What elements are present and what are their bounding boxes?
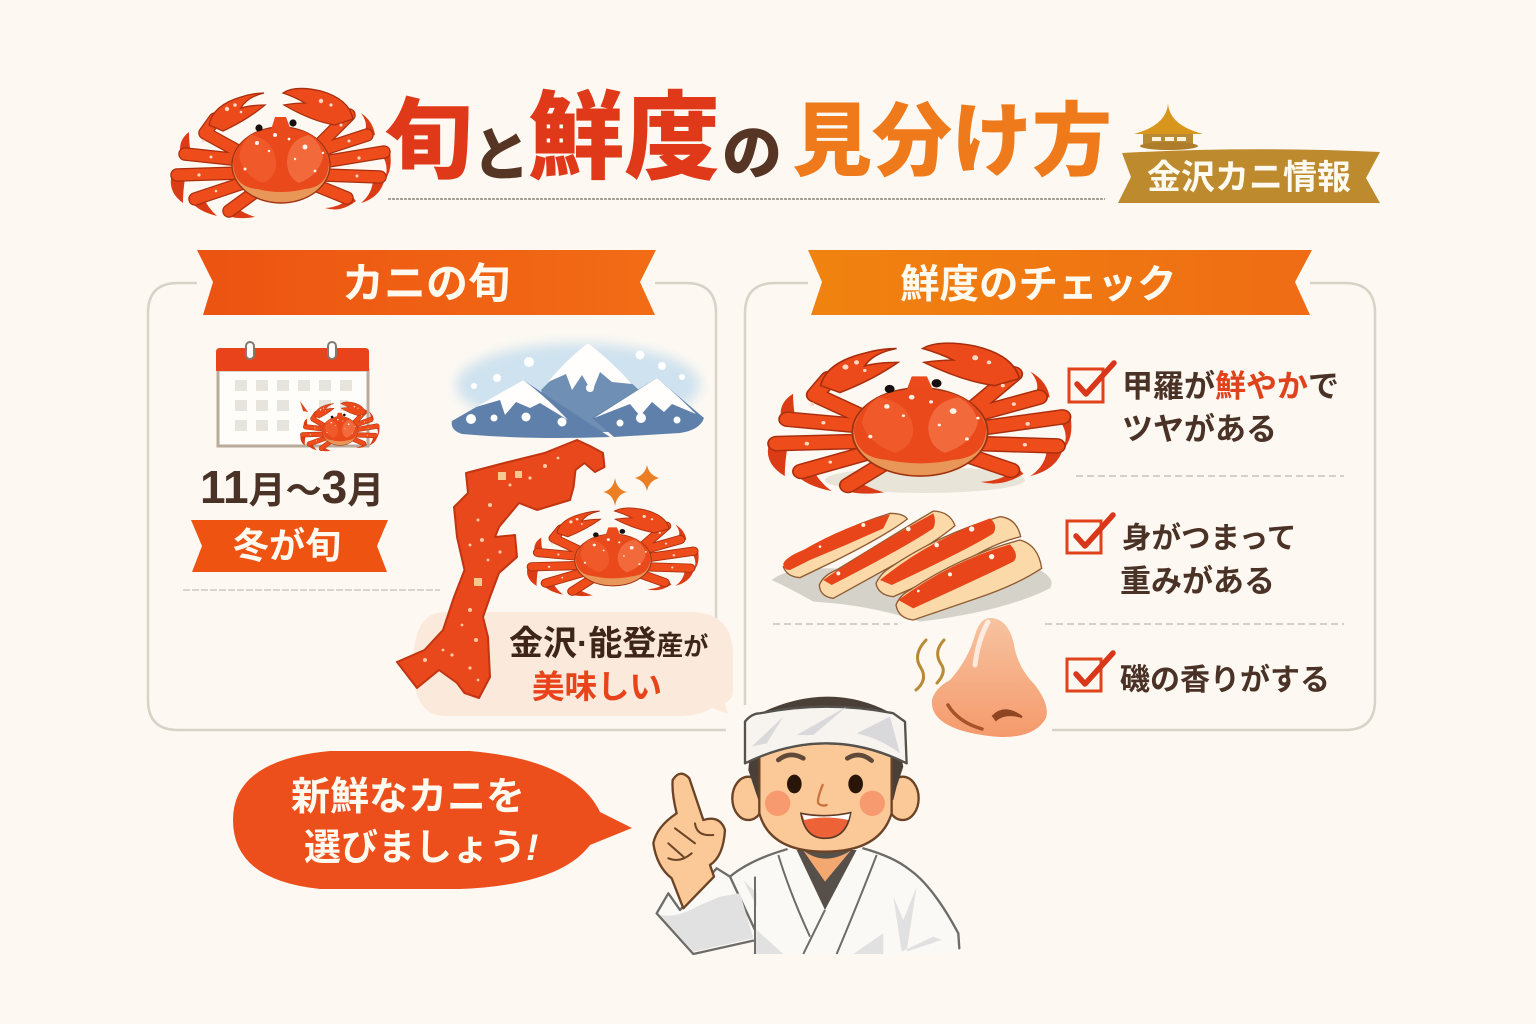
stick 2 bbox=[819, 511, 955, 598]
shadow bbox=[772, 568, 1052, 622]
badge: Kanazawa crab info bbox=[1118, 103, 1380, 203]
title: と bbox=[472, 123, 530, 188]
icon: sparkles bbox=[603, 465, 659, 506]
hair bbox=[748, 697, 903, 800]
headband bbox=[745, 707, 907, 763]
illustration: fresh crab bbox=[768, 343, 1071, 494]
stick 1 bbox=[783, 513, 907, 578]
checklist item 2: 身がつまって bbox=[1122, 521, 1296, 555]
mouth bbox=[801, 813, 851, 838]
title: の bbox=[722, 120, 782, 187]
icon: checkbox bbox=[1069, 363, 1114, 402]
icon: pagoda bbox=[1134, 103, 1203, 150]
stick 4 bbox=[896, 540, 1042, 620]
title crab illustration bbox=[171, 88, 391, 218]
map: Ishikawa prefecture bbox=[397, 440, 604, 698]
title underline bbox=[388, 198, 1105, 200]
hand pointing up bbox=[653, 774, 725, 908]
speech bubble: choose fresh crab bbox=[233, 751, 632, 889]
checklist item 1: 甲羅が鮮やかで bbox=[1122, 369, 1339, 404]
panel: freshness check frame bbox=[745, 283, 1375, 730]
divider bbox=[773, 623, 1344, 625]
panel: crab season frame bbox=[148, 283, 726, 730]
nose bbox=[818, 785, 827, 806]
banner: winter is the season: 冬が旬 bbox=[233, 525, 341, 566]
heading ribbon: crab season: カニの旬 bbox=[342, 260, 510, 307]
illustration: sushi chef bbox=[653, 697, 959, 954]
icon: nose bbox=[932, 618, 1047, 737]
checklist item 3 bbox=[1067, 653, 1330, 697]
checklist item 1: ツヤがある bbox=[1122, 412, 1277, 447]
stick 3 bbox=[876, 517, 1021, 597]
checklist item 1 bbox=[1069, 363, 1339, 447]
checklist item 2: 重みがある bbox=[1120, 564, 1275, 599]
checklist item 2 bbox=[1067, 515, 1296, 599]
eyes bbox=[787, 775, 802, 793]
divider bbox=[183, 589, 440, 591]
illustration: crab beside map bbox=[527, 508, 699, 596]
divider bbox=[1076, 475, 1344, 477]
face bbox=[759, 743, 892, 852]
illustration: crab leg meat bbox=[772, 511, 1052, 622]
icon: calendar with crab bbox=[216, 342, 380, 451]
heading ribbon: crab season bbox=[197, 250, 656, 315]
season months text: 11月～3月 bbox=[200, 461, 384, 513]
banner: winter is the season bbox=[191, 520, 388, 572]
icon: smell lines bbox=[916, 640, 944, 690]
icon: checkbox bbox=[1067, 515, 1113, 553]
title: 旬 bbox=[384, 91, 472, 190]
speech bubble: Kanazawa Noto: 美味しい bbox=[532, 669, 662, 705]
cheeks bbox=[765, 791, 790, 816]
checklist item 3: 磯の香りがする bbox=[1120, 663, 1330, 697]
kimono bbox=[657, 848, 959, 954]
icon: checkbox bbox=[1067, 653, 1113, 691]
speech bubble: choose fresh crab: 新鮮なカニを bbox=[291, 776, 525, 819]
heading ribbon: freshness check: 鮮度のチェック bbox=[900, 263, 1176, 307]
ribbon label: 金沢カニ情報 bbox=[1147, 159, 1351, 197]
title: 見分け方 bbox=[792, 97, 1112, 186]
ribbon bbox=[1118, 149, 1380, 203]
illustration: snowy mountains bbox=[452, 343, 704, 438]
collar bbox=[797, 850, 857, 910]
title bbox=[384, 85, 1112, 192]
title: 鮮度 bbox=[528, 85, 720, 192]
brows bbox=[778, 755, 872, 761]
speech bubble: choose fresh crab: 選びましょう! bbox=[304, 827, 538, 868]
speech bubble: Kanazawa Noto bbox=[413, 612, 733, 716]
ears bbox=[732, 777, 764, 820]
heading ribbon: freshness check bbox=[808, 250, 1312, 315]
speech bubble: Kanazawa Noto: 金沢·能登産が bbox=[509, 625, 708, 663]
